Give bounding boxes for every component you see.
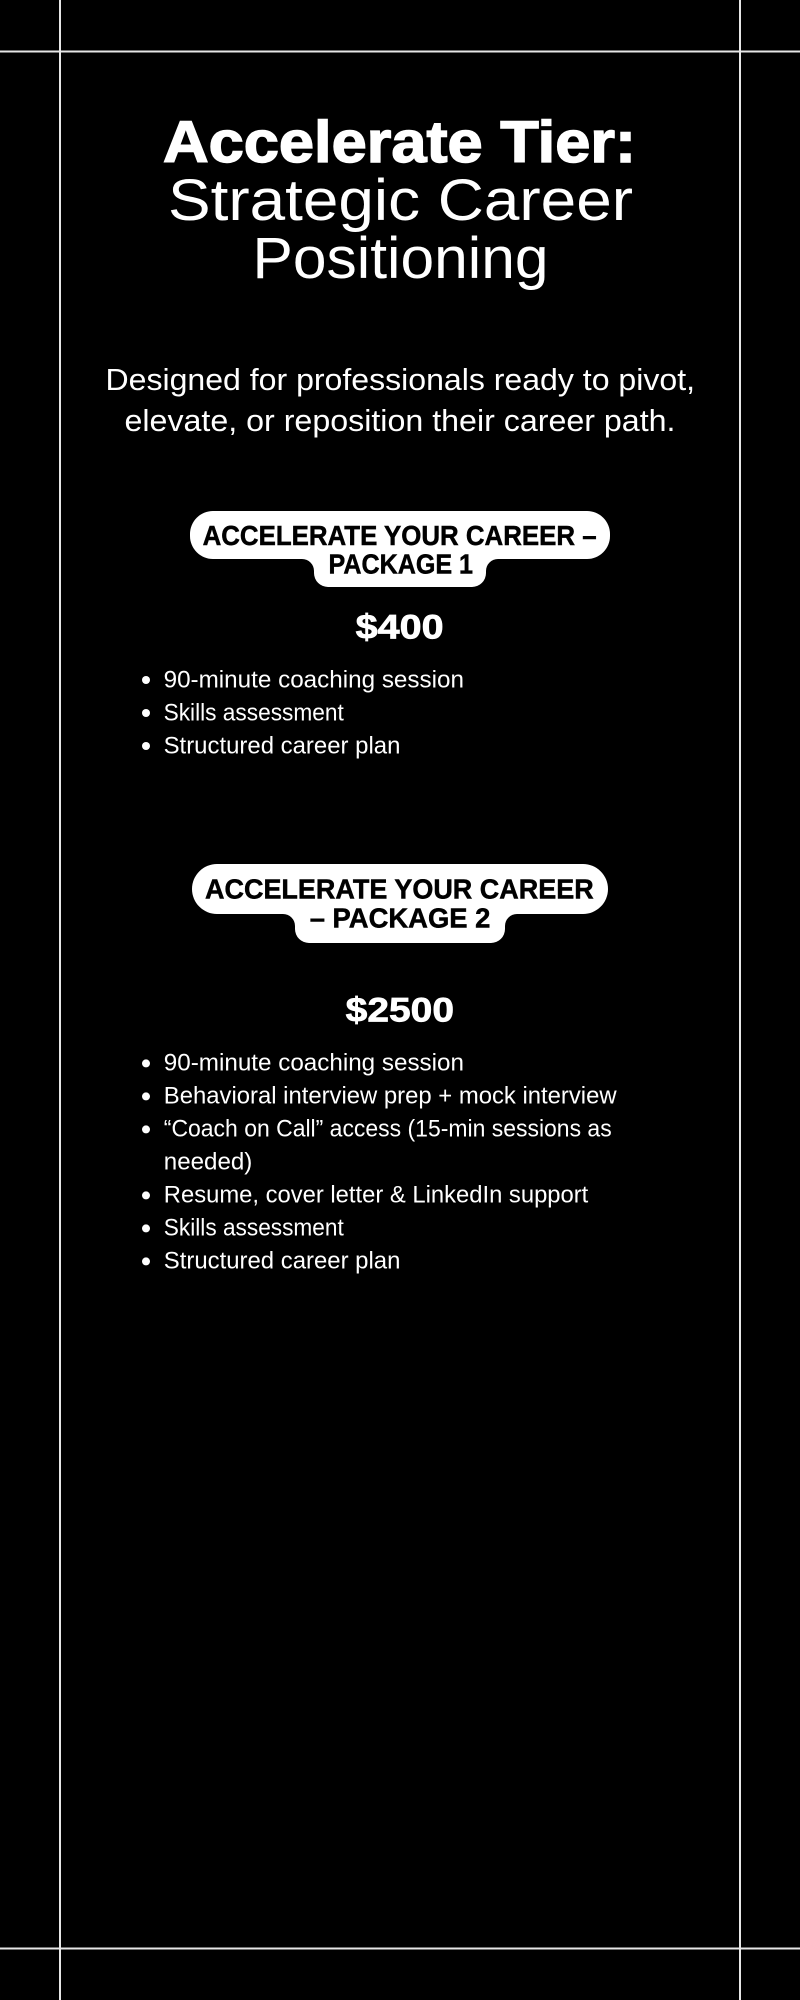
subtitle: Designed for professionals ready to pivot, bbox=[106, 362, 695, 397]
package 1 heading pill: ACCELERATE YOUR CAREER – bbox=[203, 520, 597, 551]
panel: package 2 bbox=[142, 864, 617, 1275]
package 2 feature list: 90-minute coaching session bbox=[164, 1050, 464, 1077]
package 2 heading pill: ACCELERATE YOUR CAREER bbox=[205, 873, 594, 904]
title bbox=[163, 110, 636, 291]
title: Accelerate Tier: bbox=[163, 110, 636, 175]
title: Positioning bbox=[252, 226, 548, 291]
subtitle bbox=[106, 362, 695, 438]
package 2 feature list: Behavioral interview prep + mock interview bbox=[164, 1083, 617, 1110]
package 1 feature list: 90-minute coaching session bbox=[164, 666, 464, 693]
package 2 feature list bbox=[142, 1050, 617, 1275]
package 2 price: $2500 bbox=[346, 992, 454, 1030]
package 2 feature list: “Coach on Call” access (15-min sessions as bbox=[164, 1116, 612, 1143]
panel: package 1 bbox=[142, 511, 610, 759]
package 1 heading pill: PACKAGE 1 bbox=[328, 548, 473, 579]
package 2 heading pill: – PACKAGE 2 bbox=[310, 903, 490, 934]
package 2 feature list: Structured career plan bbox=[164, 1248, 400, 1275]
package 1 feature list: Skills assessment bbox=[164, 699, 344, 726]
package 1 price: $400 bbox=[356, 608, 444, 646]
package 1 feature list: Structured career plan bbox=[164, 732, 400, 759]
package 1 heading pill bbox=[190, 511, 610, 587]
title: Strategic Career bbox=[168, 168, 633, 233]
package 2 feature list: Skills assessment bbox=[164, 1215, 344, 1242]
package 2 feature list: needed) bbox=[164, 1148, 252, 1176]
subtitle: elevate, or reposition their career path. bbox=[124, 403, 676, 438]
package 1 feature list bbox=[142, 666, 464, 759]
package 2 heading pill bbox=[192, 864, 608, 943]
package 2 feature list: Resume, cover letter & LinkedIn support bbox=[164, 1182, 589, 1209]
